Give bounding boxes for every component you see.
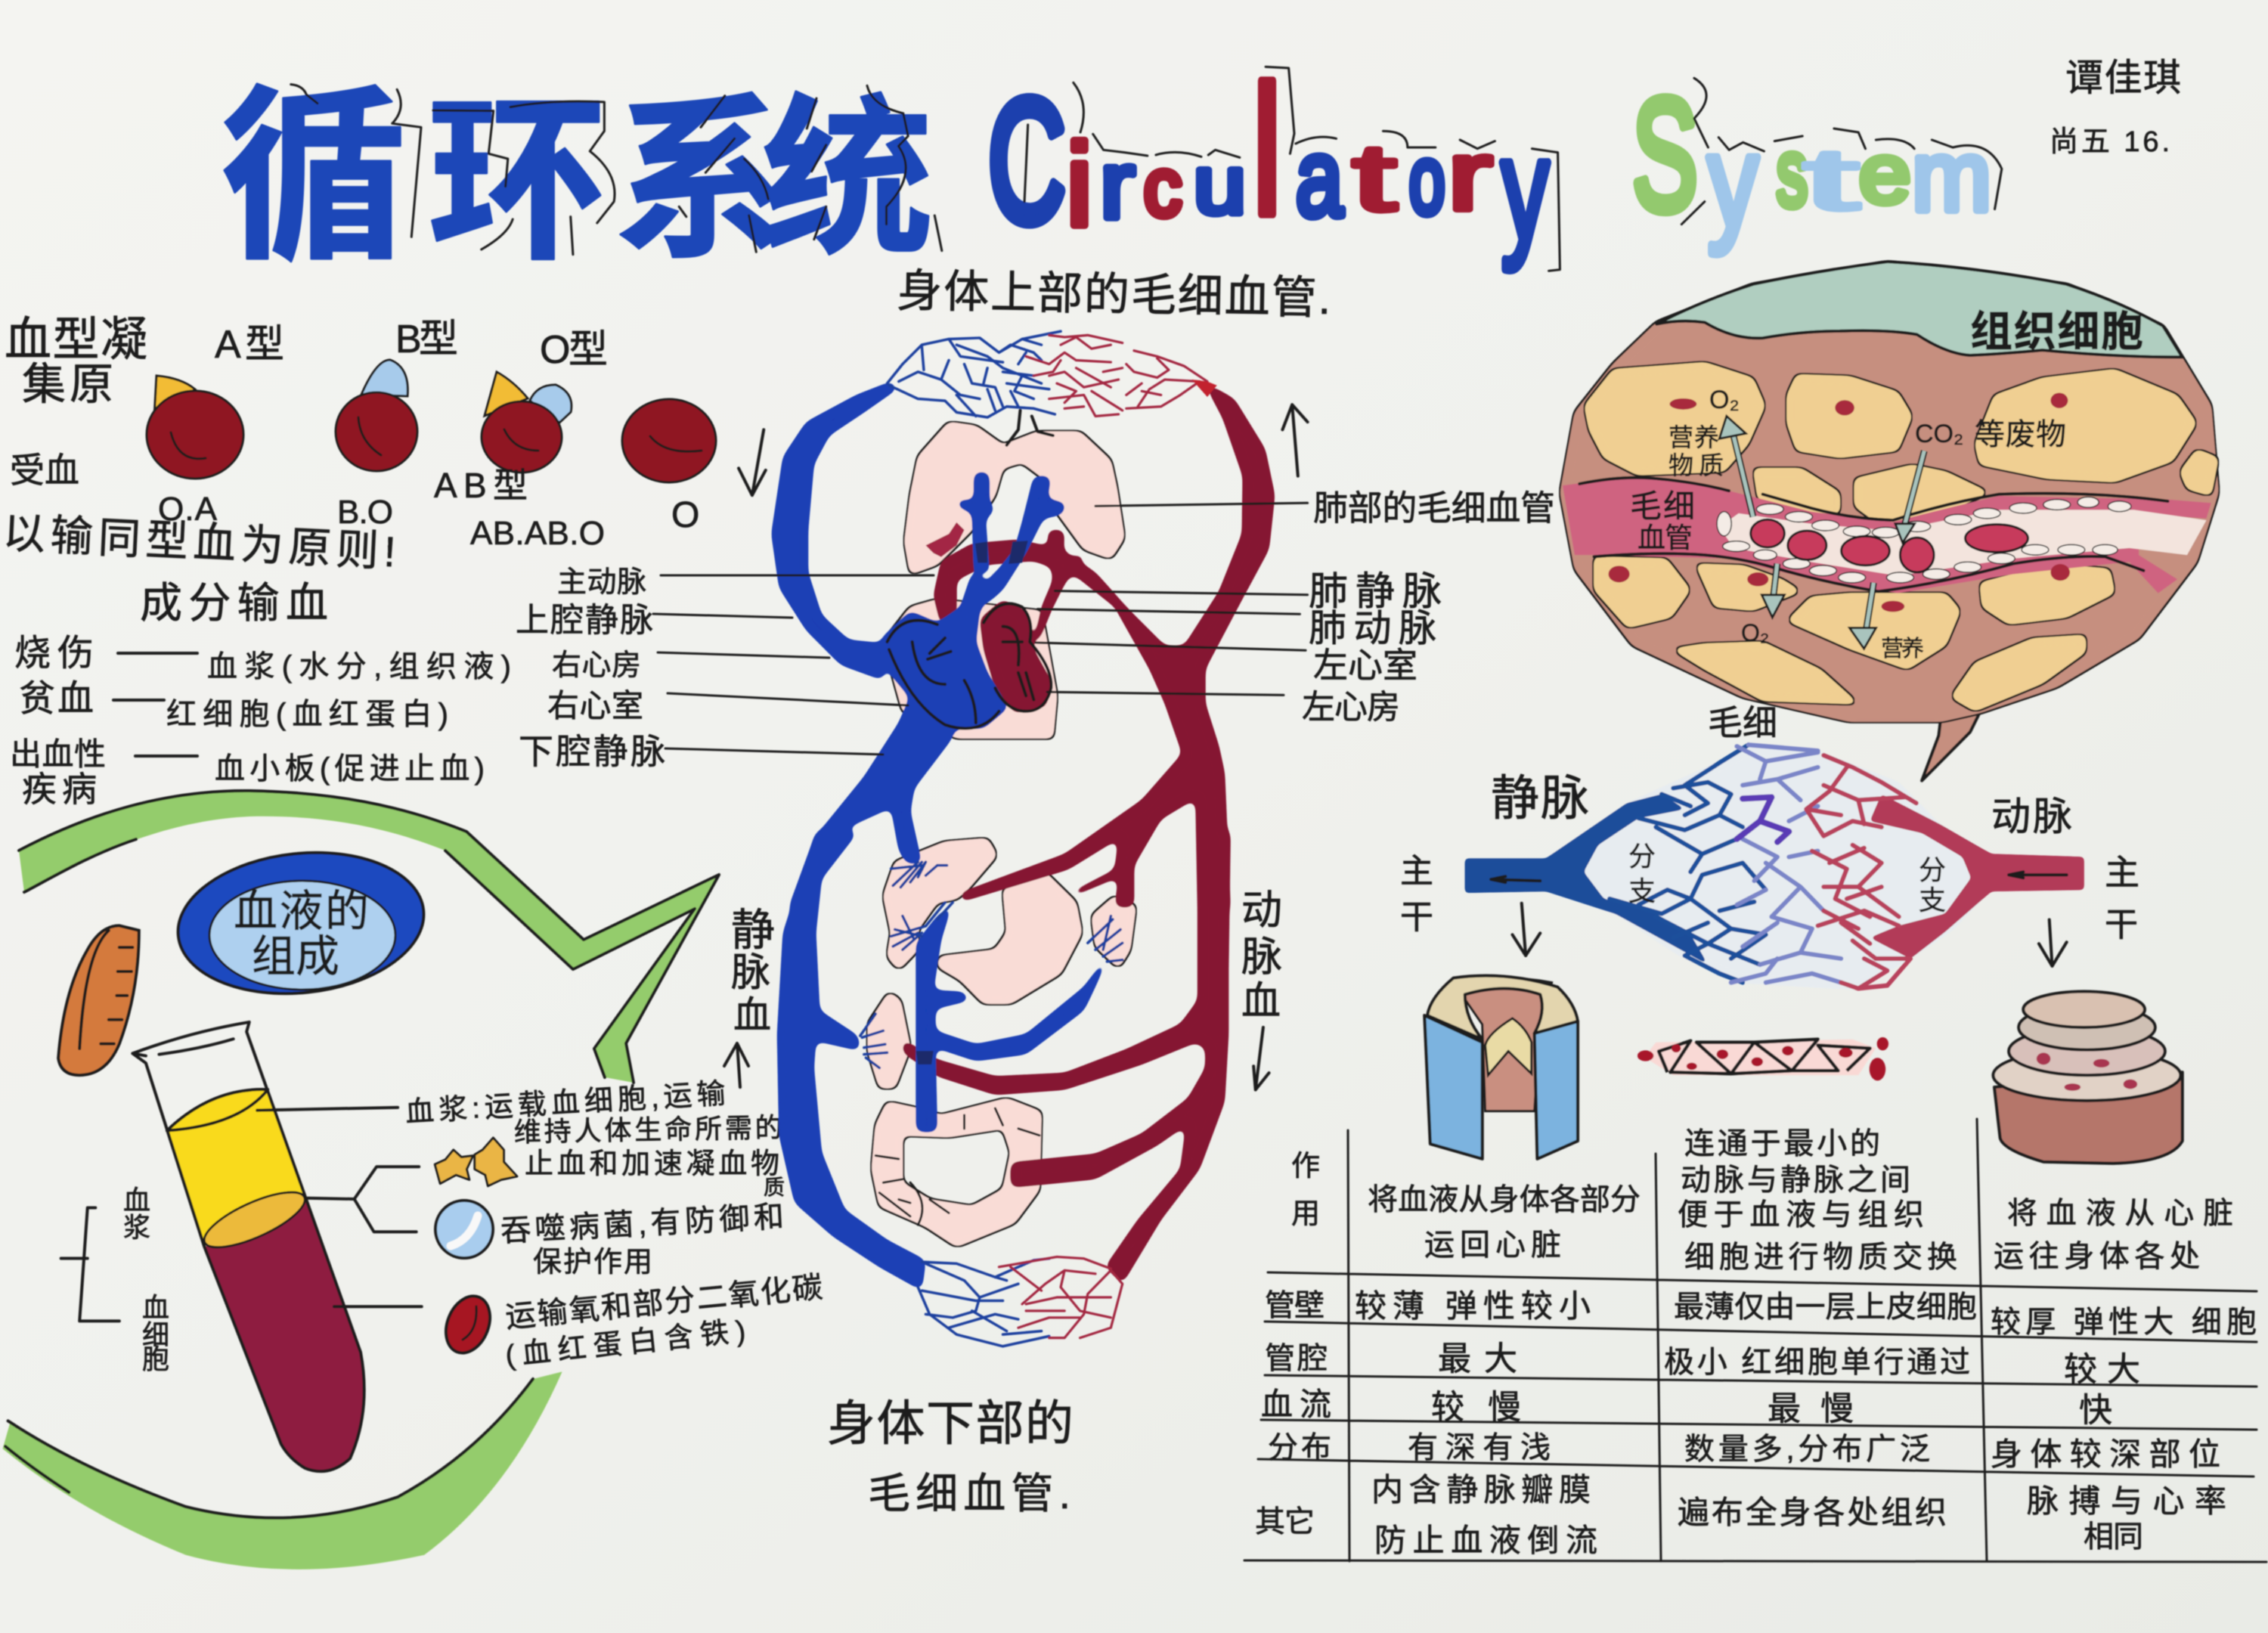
capillaries: lower vein net [918, 1259, 1049, 1346]
row: other: 内含静脉瓣膜 [1371, 1472, 1591, 1508]
row: flow: 血流 [1261, 1387, 1331, 1422]
arrow: down left [739, 429, 766, 495]
row: anemia [19, 679, 448, 731]
panel: capillary in tissue [1563, 393, 2211, 649]
panel: component transfusion [10, 579, 511, 809]
leader lines [61, 1108, 422, 1321]
title: Circulatory: r [1448, 120, 1492, 231]
label: nutrients lower: 营养 [1881, 637, 1924, 662]
portal vein [916, 903, 1105, 1132]
label: plasma side: 浆 [123, 1212, 150, 1243]
label: artery: 动脉 [1991, 795, 2072, 839]
label: AB type: AB型 [434, 466, 528, 505]
label: nutrients [1668, 423, 1724, 479]
rule: same-type transfusion: 以输同型血为原则! [2, 509, 397, 575]
table rules [1244, 1119, 2266, 1562]
speech bubble: bottom [3, 1371, 562, 1569]
trachea stubs [1007, 411, 1053, 445]
title: Chinese: 系 [614, 39, 789, 293]
vessels: arteries [903, 382, 1275, 1284]
vein stem [1465, 794, 1708, 965]
callouts: blood components [61, 1078, 824, 1374]
row: wall: 最薄仅由一层上皮细胞 [1674, 1291, 1977, 1324]
text: plasma: 维持人体生命所需的 [513, 1112, 782, 1148]
down arrows [1513, 903, 2067, 966]
diagram: circulation details [739, 331, 1308, 729]
red cell layer [204, 1198, 364, 1471]
label: left trunk: 主 [1400, 853, 1433, 890]
endothelial cells [1717, 497, 2131, 583]
title: Circulatory: o [1409, 126, 1445, 234]
diagram: capillary network [1491, 745, 2067, 988]
icon: platelets [435, 1138, 517, 1186]
capillary lumen [1719, 510, 2206, 576]
row: other: 脉搏与心率 [2027, 1483, 2226, 1519]
tissue top band [1656, 262, 2183, 357]
row: wall [1265, 1288, 2257, 1339]
row: function: 作 [1291, 1151, 1320, 1182]
heading: lower body capillaries: 毛细血管. [868, 1470, 1070, 1517]
leader lines: right labels [1036, 503, 1308, 695]
label: oxygen lower: O₂ [1741, 619, 1769, 646]
row: lumen: 管腔 [1265, 1342, 1328, 1375]
purple net [1737, 797, 1789, 842]
title: System: t [1803, 130, 1859, 228]
row: other: 防止血液倒流 [1374, 1523, 1597, 1558]
row: function: 运往身体各处 [1994, 1240, 2200, 1273]
artery stem [1870, 794, 2084, 959]
label: left atrium: 左心房 [1302, 689, 1400, 726]
row: distribution: 有深有浅 [1408, 1431, 1551, 1464]
vein wall left [1424, 1015, 1483, 1159]
label: recipient: 受血 [10, 451, 79, 490]
heading: upper body capillaries: 身体上部的毛细血管. [897, 265, 1331, 324]
capillary wall [1563, 479, 2211, 593]
artery top [2023, 991, 2145, 1027]
row: function: 将血液从身体各部分 [1368, 1183, 1641, 1216]
row: function: 运回心脏 [1424, 1229, 1561, 1262]
text: platelets [525, 1148, 785, 1199]
title: Circulatory: i [1066, 119, 1093, 250]
bubble tail [1922, 708, 1982, 781]
icon: AB cell [482, 372, 572, 473]
row: flow: 较 慢 [1431, 1389, 1521, 1426]
row: anemia: 贫血 [19, 679, 94, 719]
label: inferior vena cava: 下腔静脉 [519, 732, 665, 771]
mixed net [1731, 745, 1841, 983]
labels: capillary network [1400, 703, 2139, 944]
plasma layer [167, 1089, 305, 1247]
label: cells side [142, 1292, 169, 1374]
pulmonary crossing [975, 541, 1028, 564]
row: wall: 管壁 [1265, 1289, 1325, 1322]
diagram: capillary network background [1546, 745, 1991, 990]
row: function: 用 [1291, 1198, 1320, 1230]
label: right ventricle: 右心室 [547, 688, 643, 724]
title: Chinese [221, 26, 942, 296]
title: Circulatory: l [1252, 48, 1282, 253]
text: red blood cells: (血红蛋白含铁) [504, 1315, 747, 1372]
icon: red blood cell [438, 1290, 498, 1359]
heading: agglutinogen: 血型凝 [5, 314, 147, 366]
label: right trunk: 干 [2105, 906, 2138, 944]
artery layer 2 [2009, 1027, 2165, 1075]
panel: tissue bubble body [1560, 262, 2218, 722]
title: System: e [1859, 127, 1910, 221]
row: other: 相同 [2084, 1520, 2143, 1554]
row: burns: 烧伤 [14, 634, 94, 674]
label: arterial blood [1241, 888, 1282, 1024]
heading: blood composition: 组成 [252, 932, 339, 981]
red blood cells [1751, 519, 2028, 572]
label: lung capillaries: 肺部的毛细血管 [1313, 488, 1555, 528]
artery trunk with branches [903, 832, 1231, 1284]
heart outline [887, 603, 1051, 729]
row: other [1255, 1472, 2226, 1558]
cell nuclei [1609, 393, 2070, 612]
label: aorta: 主动脉 [557, 566, 646, 599]
label: vein: 静脉 [1491, 771, 1589, 826]
label: carbon dioxide: CO₂ [1915, 420, 1963, 448]
row: lumen: 较 大 [2064, 1351, 2140, 1388]
row: lumen: 最 大 [1438, 1340, 1517, 1377]
organ: spleen [1092, 896, 1136, 968]
row: wall: 较薄 弹性较小 [1355, 1288, 1591, 1324]
artery layer 3 [1993, 1050, 2180, 1101]
label: right branch [1919, 854, 1946, 916]
diagram: lungs and pericardium [883, 422, 1124, 739]
row: distribution [1268, 1431, 2220, 1472]
row: bleeding disorders: 出血性 [10, 736, 106, 772]
upper body vein [771, 382, 899, 680]
vessel: artery cross-section [1993, 991, 2183, 1164]
diagram: abdominal organs [868, 838, 1136, 1247]
leader lines: left labels [653, 575, 934, 755]
label: plasma side: 血 [123, 1185, 150, 1216]
label: capillary [1630, 488, 1695, 553]
label: A type: A型 [215, 323, 284, 367]
title: Circulatory: a [1296, 117, 1343, 239]
label: B type: B型 [395, 318, 458, 361]
icon: O cell [622, 399, 716, 482]
label: O type: O型 [540, 328, 608, 372]
title: Circulatory [988, 48, 1560, 271]
crossing point [916, 1051, 934, 1064]
heading: agglutinogen: 集原 [22, 360, 113, 409]
artery layer 1 [2019, 1005, 2155, 1050]
vein valves [1486, 1018, 1532, 1075]
heart right side [881, 572, 1009, 729]
table: vessel comparison [1244, 1119, 2266, 1562]
arrow: up [1282, 404, 1308, 476]
heading: lower body capillaries [827, 1396, 1074, 1517]
text: white blood cells: 保护作用 [533, 1247, 652, 1278]
text: red blood cells [504, 1271, 824, 1372]
heading: blood composition: 血液的 [234, 887, 369, 936]
pulmonary artery [1033, 530, 1088, 642]
artery outer [1994, 1072, 2183, 1164]
label: plasma side [123, 1185, 150, 1243]
icon: white blood cell [435, 1201, 493, 1258]
intestine folds [875, 1108, 1040, 1225]
title: System: S [1632, 67, 1698, 244]
label: left trunk: 干 [1400, 899, 1433, 936]
text: plasma: 血浆:运载血细胞,运输 [404, 1078, 727, 1129]
label: venous blood: 血 [733, 994, 771, 1037]
capillaries: lower artery net [999, 1257, 1123, 1338]
row: distribution: 身体较深部位 [1991, 1436, 2220, 1472]
label: nutrients: 物质 [1668, 451, 1724, 479]
row: lumen [1265, 1340, 2140, 1388]
artery capillary origin [1192, 380, 1217, 397]
row: flow: 快 [2079, 1392, 2112, 1429]
row: function: 连通于最小的 [1684, 1127, 1880, 1160]
row: flow: 最 慢 [1768, 1390, 1854, 1427]
interface layer [197, 1182, 312, 1258]
pulmonary vein right [984, 476, 1067, 603]
title: Chinese: 环 [428, 36, 606, 295]
icon: B cell [336, 360, 417, 471]
label: O: O [671, 495, 699, 535]
label: arterial blood: 脉 [1241, 934, 1282, 980]
label: tissue cells: 组织细胞 [1970, 308, 2143, 355]
label: nutrients: 营养 [1668, 423, 1719, 451]
title: Circulatory: t [1352, 125, 1396, 231]
icon: red blood cell coin [58, 925, 139, 1075]
title: System [1632, 67, 2002, 255]
title: System: s [1777, 121, 1808, 226]
heading: lower body capillaries: 身体下部的 [827, 1396, 1074, 1451]
labels: tissue bubble [1630, 308, 2143, 662]
row: bleeding disorders: 血小板(促进止血) [215, 752, 485, 786]
lungs [904, 422, 1124, 575]
label: arterial blood: 血 [1241, 980, 1281, 1024]
capillary outline [1579, 478, 2167, 591]
title: Circulatory: r [1100, 132, 1135, 239]
label: left trunk [1400, 853, 1433, 936]
diagram: lower circulation details [860, 862, 1269, 1346]
label: cells side: 血 [142, 1292, 169, 1323]
exchange arrows [1719, 416, 1924, 649]
labels: left of heart [516, 566, 665, 771]
artery wall speckles [2037, 1053, 2137, 1091]
stem arrows [1491, 872, 2067, 882]
heading: agglutinogen [5, 314, 147, 409]
row: burns: 血浆(水分,组织液) [207, 650, 511, 683]
label: O.A: O.A [158, 491, 218, 528]
organ: stomach [937, 872, 1082, 1004]
organ: kidney [868, 992, 910, 1088]
labels: right of heart [1302, 488, 1555, 726]
row: flow [1261, 1387, 2112, 1429]
label: venous blood: 脉 [731, 951, 770, 995]
arrow: venous up [724, 1043, 748, 1087]
row: function [1291, 1127, 2233, 1274]
label: pulmonary artery: 肺动脉 [1309, 607, 1436, 649]
row: function: 将血液从心脏 [2007, 1197, 2233, 1230]
text: platelets: 止血和加速凝血物 [525, 1148, 779, 1180]
label: cells side: 胞 [142, 1343, 169, 1374]
vein trunk [777, 832, 925, 1291]
title: Chinese: 统 [762, 41, 933, 288]
label: left ventricle: 左心室 [1313, 646, 1418, 685]
vein lumen [1453, 978, 1552, 1111]
label: cells side: 细 [142, 1319, 169, 1350]
row: distribution: 分布 [1268, 1431, 1331, 1464]
arterial net [1806, 755, 1916, 988]
text: platelets: 质 [764, 1176, 785, 1199]
title: Circulatory: u [1194, 138, 1246, 231]
label: right trunk [2105, 853, 2139, 944]
red lung branch [925, 522, 965, 557]
label: venous blood: 静 [731, 906, 775, 955]
label: superior vena cava: 上腔静脉 [516, 602, 653, 639]
vein capillary brushes [860, 862, 1123, 1067]
label: left branch: 支 [1628, 875, 1656, 906]
left heart [980, 600, 1053, 713]
title: Circulatory: c [1144, 141, 1182, 234]
title: Circulatory: C [988, 64, 1066, 258]
row: bleeding disorders: 疾病 [22, 770, 97, 809]
tube outline [132, 1022, 364, 1471]
label: capillary: 毛细 [1630, 488, 1695, 524]
vessel: capillary sample [1637, 1037, 1888, 1080]
label: capillary: 毛细 [1708, 703, 1777, 742]
title: System: m [1912, 122, 1991, 232]
label: left branch [1628, 841, 1656, 906]
row: distribution: 数量多,分布广泛 [1684, 1433, 1930, 1466]
label: AB.AB.O: AB.AB.O [470, 515, 605, 552]
venous net [1610, 745, 1766, 983]
row: lumen: 极小 红细胞单行通过 [1664, 1346, 1970, 1379]
aorta and systemic artery [934, 382, 1275, 907]
arrow: arterial blood down [1253, 1027, 1269, 1089]
class and number: 尚五 16. [2050, 126, 2170, 158]
label: waste: 等废物 [1975, 418, 2066, 451]
pericardium [883, 600, 1057, 739]
panel: blood types [2, 314, 716, 575]
label: right branch: 支 [1919, 885, 1946, 916]
row: other: 遍布全身各处组织 [1678, 1495, 1947, 1530]
title: System: y [1708, 108, 1758, 255]
heading: blood composition [171, 841, 431, 1006]
tissue cells [1585, 362, 2218, 711]
title: Chinese: 循 [221, 26, 407, 296]
organ: liver [883, 838, 997, 970]
label: right atrium: 右心房 [552, 649, 641, 682]
row: other: 其它 [1255, 1505, 1315, 1538]
text: plasma [404, 1078, 782, 1148]
label: right trunk: 主 [2105, 853, 2139, 892]
row: burns [14, 634, 511, 683]
test tube [132, 1022, 364, 1471]
capillaries: upper artery net [1026, 335, 1207, 417]
text: white blood cells: 吞噬病菌,有防御和 [500, 1200, 785, 1248]
row: wall: 较厚 弹性大 细胞 [1991, 1306, 2257, 1339]
inferior vena cava with hepatic branch [789, 696, 965, 907]
label: venous blood [724, 906, 775, 1087]
row: function: 细胞进行物质交换 [1684, 1241, 1957, 1274]
vein wall right [1535, 1021, 1578, 1159]
vessel: vein cross-section [1424, 976, 1578, 1159]
gastric artery branches [960, 754, 1200, 907]
row: anemia: 红细胞(血红蛋白) [166, 698, 448, 731]
speech bubble: top [19, 791, 719, 1083]
row: bleeding disorders [10, 736, 485, 809]
row: function: 便于血液与组织 [1678, 1198, 1924, 1232]
label: right branch: 分 [1919, 854, 1946, 885]
label: capillary: 血管 [1637, 522, 1693, 553]
label: left branch: 分 [1628, 841, 1656, 872]
icon: A cell [147, 376, 243, 479]
author name: 谭佳琪 [2065, 57, 2181, 99]
organ: intestine [872, 1098, 1042, 1247]
row: function: 动脉与静脉之间 [1681, 1164, 1910, 1197]
vein wall rim [1427, 976, 1578, 1040]
heading: component transfusion: 成分输血 [140, 579, 328, 627]
label: oxygen: O₂ [1709, 386, 1740, 414]
text: white blood cells [500, 1200, 785, 1278]
label: arterial blood: 动 [1241, 888, 1282, 933]
vessels: veins [771, 382, 1105, 1291]
title: Circulatory: y [1501, 109, 1548, 271]
label: pulmonary vein: 肺静脉 [1309, 570, 1442, 614]
pulmonary vein left [956, 472, 995, 572]
label: B.O: B.O [337, 494, 393, 531]
capillaries: upper vein net [887, 331, 1061, 417]
text: red blood cells: 运输氧和部分二氧化碳 [504, 1271, 824, 1334]
